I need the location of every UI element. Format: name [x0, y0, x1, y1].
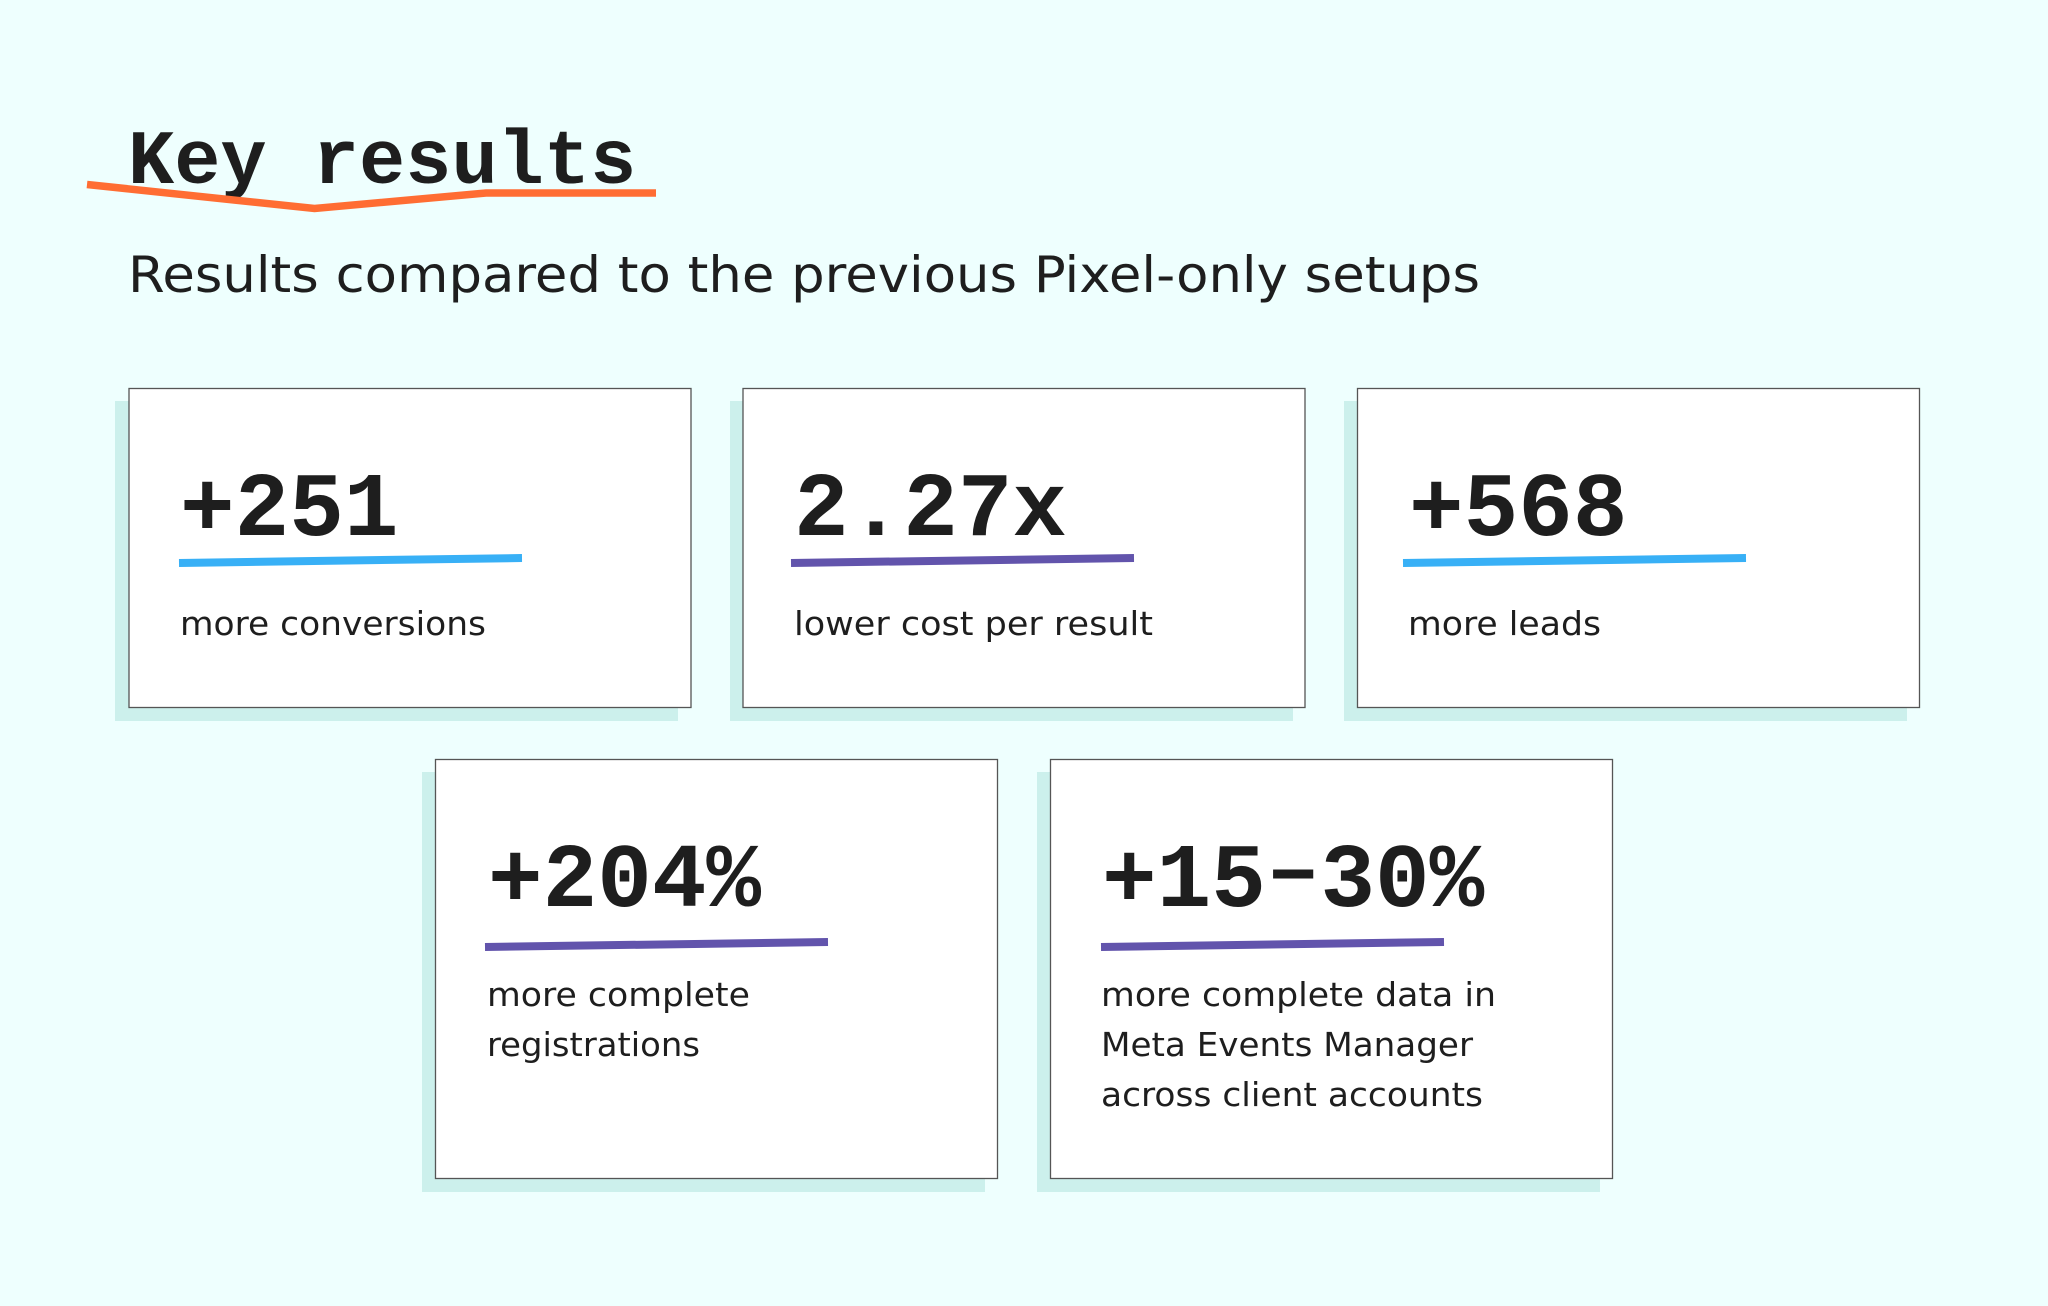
stat: 2.27x: 2.27x: [794, 460, 1067, 563]
panel: lower cost per result: [730, 388, 1305, 721]
accent underline: purple: [1101, 942, 1444, 947]
label: lower cost per result: lower cost per result: [794, 604, 1153, 643]
stat: +204%: +204%: [488, 831, 761, 934]
label: more complete registrations: registrations: [487, 1025, 700, 1064]
label: more complete data in Meta Events Manager across client accounts: more complete data in: [1101, 975, 1496, 1014]
stat: +15–30%: –: [1266, 822, 1320, 925]
title: Key results: [128, 120, 636, 207]
label: more leads: more leads: [1408, 604, 1601, 643]
accent underline: purple: [791, 558, 1134, 563]
panel: more conversions: [115, 388, 691, 721]
stat: +15–30%: 30%: [1320, 831, 1485, 934]
panel: more leads: [1344, 388, 1920, 721]
panel: more complete data: [1037, 760, 1612, 1192]
accent underline: blue: [1403, 558, 1746, 563]
label: more complete registrations: [487, 975, 750, 1064]
stat: +251: +251: [180, 460, 398, 563]
label: more complete registrations: more complete: [487, 975, 750, 1014]
label: more conversions: more conversions: [180, 604, 486, 643]
label: more complete data in Meta Events Manager across client accounts: across client accounts: [1101, 1075, 1483, 1114]
subtitle: Results compared to the previous Pixel-only setups: [128, 246, 1480, 304]
accent underline: purple: [485, 942, 828, 947]
stat: +568: +568: [1409, 460, 1627, 563]
panel: more complete registrations: [422, 760, 998, 1192]
label: more complete data in Meta Events Manager across client accounts: [1101, 975, 1496, 1114]
title underline: [87, 184, 656, 208]
label: more complete data in Meta Events Manager across client accounts: Meta Events Manager: [1101, 1025, 1473, 1064]
stat: +15–30%: +15: [1102, 831, 1266, 934]
accent underline: blue: [179, 558, 522, 563]
